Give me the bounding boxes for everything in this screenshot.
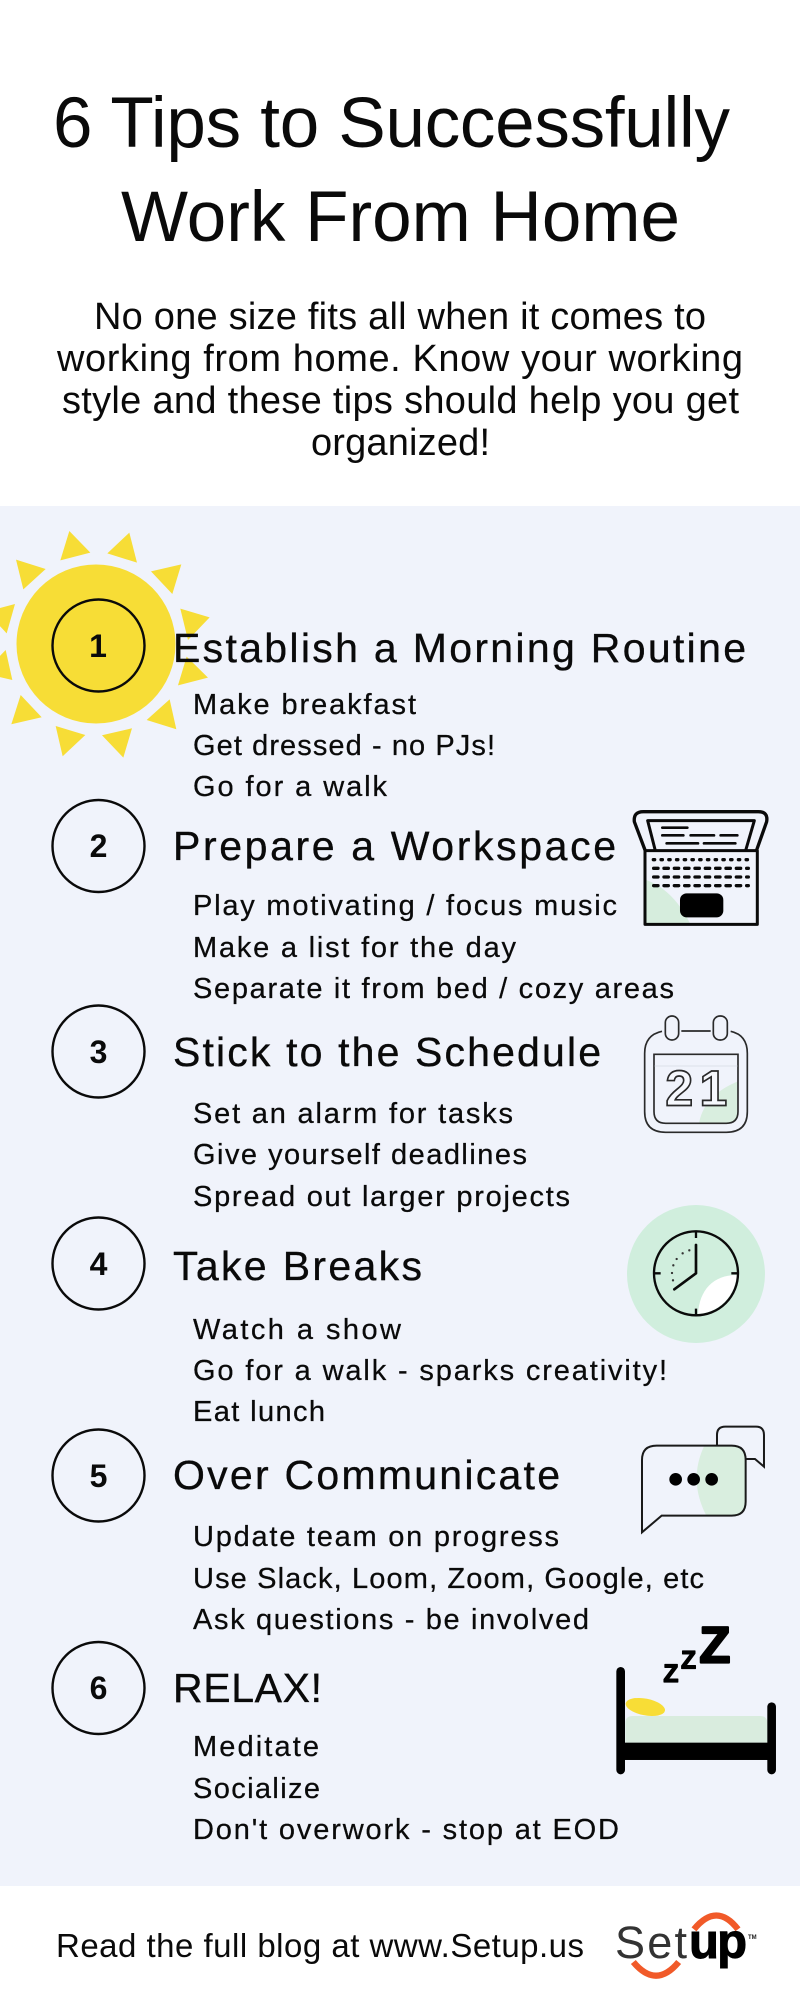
icon: clock [627,1205,765,1343]
list 2: Play motivating / focus music [193,890,617,922]
heading 1: Establish a Morning Routine [173,625,746,671]
number badge 1: 1 [89,628,107,664]
list 1: Make breakfast [193,689,416,721]
logo: Setup [615,1915,757,1976]
list 3: Give yourself deadlines [193,1139,527,1171]
tip 2 [52,800,674,1005]
heading 6: RELAX! [173,1665,322,1711]
list 6: Socialize [193,1773,320,1805]
intro text: organized! [311,422,490,464]
number badge 3 [52,1006,144,1098]
list 1 [193,689,495,803]
number badge 6: 6 [90,1670,107,1706]
list 4: Go for a walk - sparks creativity! [193,1355,667,1387]
intro text: No one size fits all when it comes to [94,296,706,338]
logo: Setup: up [689,1915,747,1969]
panel: tips background [0,506,800,1886]
intro text: style and these tips should help you get [62,380,739,422]
list 2: Make a list for the day [193,932,516,964]
list 5: Use Slack, Loom, Zoom, Google, etc [193,1563,704,1595]
intro text: working from home. Know your working [56,338,743,380]
list 6 [193,1731,619,1846]
number badge 1 [52,600,144,692]
icon: bed with sleeping Zs: Z [699,1616,730,1673]
list 6: Meditate [193,1731,319,1763]
list 5 [193,1521,704,1636]
title: 6 Tips to Successfully [53,84,730,163]
intro text [56,296,743,464]
tip 3 [52,1006,601,1213]
number badge 4: 4 [90,1246,108,1282]
number badge 3: 3 [90,1034,107,1070]
icon: calendar: 21 [665,1060,727,1116]
number badge 5 [52,1430,144,1522]
list 1: Get dressed - no PJs! [193,730,495,762]
title: Work From Home [121,178,680,257]
icon: sun [0,531,210,758]
list 4: Watch a show [193,1314,402,1346]
footer text: Read the full blog at www.Setup.us [56,1927,584,1964]
tip 5 [52,1430,704,1636]
tip 4 [52,1218,667,1428]
icon: chat bubbles [642,1427,764,1532]
icon: laptop [634,812,767,924]
tip 6 [52,1642,619,1846]
list 2 [193,890,674,1005]
number badge 4 [52,1218,144,1310]
list 5: Update team on progress [193,1521,559,1553]
icon: bed with sleeping Zs: Z [663,1661,678,1688]
list 5: Ask questions - be involved [193,1604,589,1636]
title [53,84,730,257]
list 2: Separate it from bed / cozy areas [193,973,674,1005]
heading 5: Over Communicate [173,1452,560,1498]
number badge 5: 5 [90,1458,107,1494]
list 3: Spread out larger projects [193,1181,570,1213]
list 1: Go for a walk [193,771,388,803]
list 6: Don't overwork - stop at EOD [193,1814,619,1846]
list 4: Eat lunch [193,1396,325,1428]
number badge 6 [52,1642,144,1734]
list 3 [193,1098,570,1213]
tip 1 [52,600,746,803]
heading 4: Take Breaks [173,1243,422,1289]
number badge 2 [52,800,144,892]
list 3: Set an alarm for tasks [193,1098,513,1130]
icon: bed with sleeping Zs [621,1616,772,1770]
icon: bed with sleeping Zs: Z [681,1648,696,1675]
logo: Setup: Set [615,1917,687,1968]
heading 2: Prepare a Workspace [173,823,616,869]
list 4 [193,1314,667,1428]
heading 3: Stick to the Schedule [173,1029,601,1075]
number badge 2: 2 [90,828,107,864]
logo: Setup: TM [748,1935,757,1941]
icon: calendar [645,1016,747,1132]
